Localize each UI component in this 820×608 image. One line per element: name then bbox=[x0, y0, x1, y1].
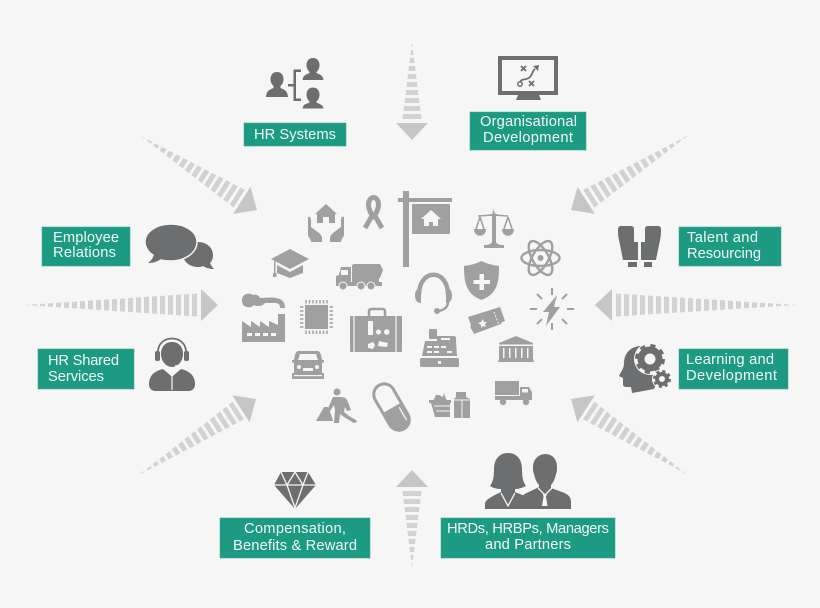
label: HR Shared Services bbox=[38, 349, 134, 389]
icon: HR systems people hierarchy bbox=[266, 58, 324, 108]
label: Learning and Development: Development bbox=[686, 368, 777, 384]
label: HR Shared Services: HR Shared bbox=[48, 353, 119, 369]
label: Organisational Development bbox=[470, 112, 586, 150]
label: Compensation, Benefits and Reward bbox=[220, 518, 370, 558]
icon: house in hands bbox=[308, 204, 344, 242]
arrow: top right pointing inward bbox=[562, 121, 698, 223]
icon: delivery truck bbox=[495, 381, 532, 405]
label: HRDs, HRBPs, Managers and Partners: and Partners bbox=[485, 537, 571, 553]
label: Learning and Development: Learning and bbox=[686, 352, 774, 368]
arrow: bottom pointing up bbox=[396, 470, 428, 568]
icon: suitcase with stickers bbox=[350, 309, 402, 352]
label: Talent and Resourcing: Resourcing bbox=[687, 246, 761, 262]
label: HRDs, HRBPs, Managers and Partners: HRDs, HRBPs, Managers bbox=[447, 521, 609, 537]
icon: road worker with shovel bbox=[316, 388, 357, 423]
icon: headset agent bbox=[149, 338, 195, 391]
arrow: left pointing right bbox=[24, 289, 218, 321]
label: HR Systems bbox=[244, 123, 346, 146]
icon: awareness ribbon bbox=[365, 198, 382, 228]
icon: groceries bbox=[429, 392, 470, 418]
icon: scales of justice bbox=[474, 209, 514, 248]
label: Employee Relations: Employee bbox=[53, 230, 119, 246]
label: Organisational Development: Development bbox=[483, 130, 573, 146]
icon: medicine capsule bbox=[369, 379, 415, 436]
arrow: top left pointing inward bbox=[132, 122, 266, 223]
label: Organisational Development: Organisational bbox=[480, 114, 577, 130]
arrow: top pointing down bbox=[396, 42, 428, 140]
label: Employee Relations bbox=[42, 227, 130, 266]
label: Compensation, Benefits and Reward: Benefits & Reward bbox=[233, 538, 357, 554]
icon: car front bbox=[292, 351, 324, 379]
arrow: right pointing left bbox=[595, 289, 797, 321]
icon: monitor with strategy route bbox=[500, 58, 556, 100]
icon: for-sale sign with house bbox=[398, 191, 452, 267]
label: HRDs, HRBPs, Managers and Partners bbox=[441, 518, 615, 558]
icon: bank building bbox=[498, 336, 534, 362]
icon: atom bbox=[522, 238, 560, 278]
icon: lightning burst bbox=[530, 288, 574, 330]
icon: cash register bbox=[420, 329, 459, 367]
arrow: bottom left pointing inward bbox=[130, 386, 265, 489]
label: HR Systems: HR Systems bbox=[254, 127, 336, 143]
central icon cluster bbox=[242, 191, 574, 436]
arrow: bottom right pointing inward bbox=[562, 386, 695, 488]
icon: factory bbox=[242, 294, 285, 342]
label: Employee Relations: Relations bbox=[53, 245, 116, 261]
icon: two business people bbox=[485, 453, 571, 509]
label: Compensation, Benefits and Reward: Compensation, bbox=[244, 521, 346, 537]
icon: diamond bbox=[274, 472, 316, 509]
label: Learning and Development bbox=[679, 349, 788, 389]
icon: headset bbox=[415, 275, 452, 314]
label: Talent and Resourcing: Talent and bbox=[687, 230, 758, 246]
icon: dump truck bbox=[336, 264, 383, 290]
icon: health shield bbox=[464, 261, 499, 300]
icon: ticket bbox=[468, 307, 505, 334]
icon: binoculars bbox=[618, 226, 661, 267]
icon: microchip bbox=[300, 300, 333, 334]
label: HR Shared Services: Services bbox=[48, 369, 104, 385]
icon: graduation cap bbox=[271, 249, 309, 278]
icon: speech bubbles bbox=[145, 224, 214, 269]
icon: head with gears bbox=[619, 343, 672, 393]
label: Talent and Resourcing bbox=[679, 227, 781, 266]
